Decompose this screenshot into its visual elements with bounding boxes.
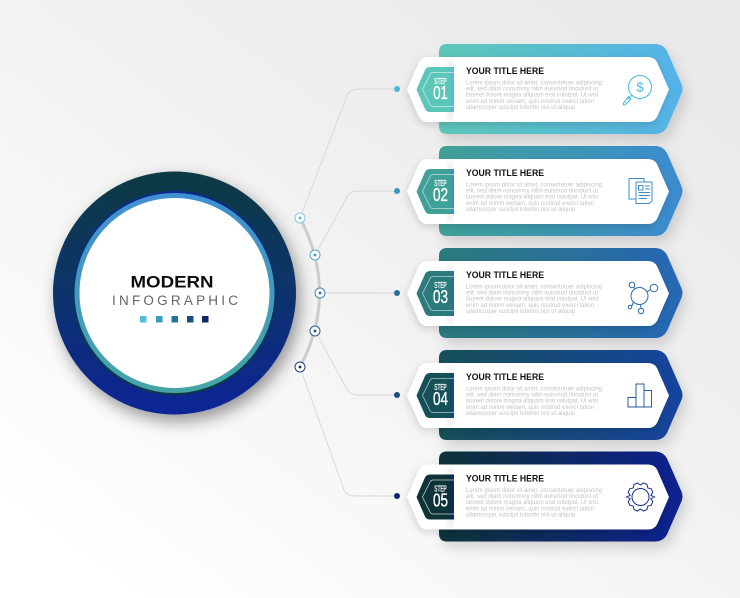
step number: 03: [433, 287, 448, 307]
white body: [454, 159, 644, 224]
back shape: [439, 44, 682, 134]
step label: STEP: [434, 484, 447, 494]
tag outline: [422, 276, 454, 310]
tag shadow: [447, 264, 454, 324]
body text: enim ad minim veniam, quis nostrud exerci tation: [466, 302, 595, 309]
white card: [407, 261, 669, 326]
icon: magnifier with dollar: $: [636, 80, 644, 94]
connector lines: [300, 89, 397, 496]
tag outline: [422, 72, 454, 106]
body text: laoreet dolore magna aliquam erat volutpat. Ut wisi: [466, 194, 598, 201]
tag shadow: [447, 366, 454, 426]
step tag: [416, 67, 454, 112]
body text: enim ad minim veniam, quis nostrud exerci tation: [466, 98, 595, 105]
title: YOUR TITLE HERE: [466, 66, 544, 76]
inner dark ring: [72, 191, 276, 395]
body text: Lorem ipsum dolor sit amet, consectetuer adipiscing: [466, 182, 603, 188]
outer ring: [53, 172, 296, 414]
back shape: [439, 146, 682, 236]
step label: STEP: [434, 383, 447, 392]
panel: step 05: [407, 452, 682, 542]
colour squares: [140, 316, 208, 322]
body text: ullamcorper suscipit lobortis nisl ut aliquip: [466, 206, 576, 213]
body text: elit, sed diam nonummy nibh euismod tincidunt ut: [466, 86, 598, 93]
step number: 04: [433, 389, 448, 409]
icon: molecule network: [628, 282, 658, 314]
body text: ullamcorper suscipit lobortis nisl ut aliquip: [466, 308, 576, 315]
icon: gear: [626, 483, 654, 511]
body text: [466, 487, 603, 518]
body text: laoreet dolore magna aliquam erat volutpat. Ut wisi: [466, 499, 598, 506]
icon: bar chart: [628, 384, 652, 407]
body text: elit, sed diam nonummy nibh euismod tincidunt ut: [466, 188, 598, 195]
arc nodes: [295, 213, 325, 372]
body text: elit, sed diam nonummy nibh euismod tincidunt ut: [466, 493, 598, 500]
white card: [407, 363, 669, 428]
body text: ullamcorper suscipit lobortis nisl ut aliquip: [466, 410, 576, 417]
body text: ullamcorper suscipit lobortis nisl ut aliquip: [466, 104, 576, 111]
step label: STEP: [434, 179, 447, 188]
step tag: [416, 169, 454, 214]
back shape: [439, 350, 682, 440]
step tag: [416, 474, 454, 520]
back shape: [439, 248, 682, 338]
title: YOUR TITLE HERE: [466, 168, 544, 178]
body text: enim ad minim veniam, quis nostrud exerci tation: [466, 200, 595, 207]
white card: [407, 159, 669, 224]
white body: [454, 57, 644, 122]
tag outline: [422, 480, 454, 514]
body text: [466, 386, 603, 417]
step number: 02: [433, 185, 448, 205]
back shape: [439, 452, 682, 542]
white card: [407, 57, 669, 122]
body text: enim ad minim veniam, quis nostrud exerci tation: [466, 404, 595, 411]
body text: [466, 284, 603, 315]
arc connector: [300, 218, 320, 367]
step number: 05: [433, 490, 448, 510]
step label: STEP: [434, 281, 447, 290]
tag shadow: [447, 468, 454, 528]
icon: documents: [629, 178, 652, 204]
step tag: [416, 271, 454, 316]
white body: [454, 464, 644, 530]
step tag: [416, 373, 454, 418]
body text: laoreet dolore magna aliquam erat volutpat. Ut wisi: [466, 398, 598, 405]
white body: [454, 363, 644, 428]
body text: elit, sed diam nonummy nibh euismod tincidunt ut: [466, 290, 598, 297]
main circle: [53, 172, 296, 414]
step label: STEP: [434, 77, 447, 86]
body text: Lorem ipsum dolor sit amet, consectetuer adipiscing: [466, 80, 603, 86]
body text: [466, 182, 603, 213]
icon: magnifier with dollar: [623, 76, 652, 105]
title: YOUR TITLE HERE: [466, 372, 544, 382]
body text: Lorem ipsum dolor sit amet, consectetuer adipiscing: [466, 284, 603, 290]
title: YOUR TITLE HERE: [466, 270, 544, 280]
tag shadow: [447, 60, 454, 120]
panel: step 01: [407, 44, 682, 134]
white card: [407, 464, 669, 530]
panel: step 02: [407, 146, 682, 236]
tag outline: [422, 174, 454, 208]
body text: [466, 80, 603, 111]
heading: infographic: INFOGRAPHIC: [112, 293, 238, 308]
tag outline: [422, 378, 454, 412]
heading: modern: MODERN: [130, 272, 214, 292]
tag shadow: [447, 162, 454, 222]
connector end dots: [394, 86, 400, 499]
body text: enim ad minim veniam, quis nostrud exerci tation: [466, 505, 595, 512]
white body: [454, 261, 644, 326]
body text: elit, sed diam nonummy nibh euismod tincidunt ut: [466, 392, 598, 399]
body text: ullamcorper suscipit lobortis nisl ut aliquip: [466, 511, 576, 518]
body text: Lorem ipsum dolor sit amet, consectetuer adipiscing: [466, 386, 603, 392]
step number: 01: [433, 83, 448, 103]
body text: laoreet dolore magna aliquam erat volutpat. Ut wisi: [466, 296, 598, 303]
title: YOUR TITLE HERE: [466, 474, 544, 484]
teal-blue ring: [74, 193, 274, 393]
white disc: [80, 198, 270, 388]
body text: laoreet dolore magna aliquam erat volutpat. Ut wisi: [466, 92, 598, 99]
panel: step 03: [407, 248, 682, 338]
body text: Lorem ipsum dolor sit amet, consectetuer adipiscing: [466, 487, 603, 494]
panel: step 04: [407, 350, 682, 440]
